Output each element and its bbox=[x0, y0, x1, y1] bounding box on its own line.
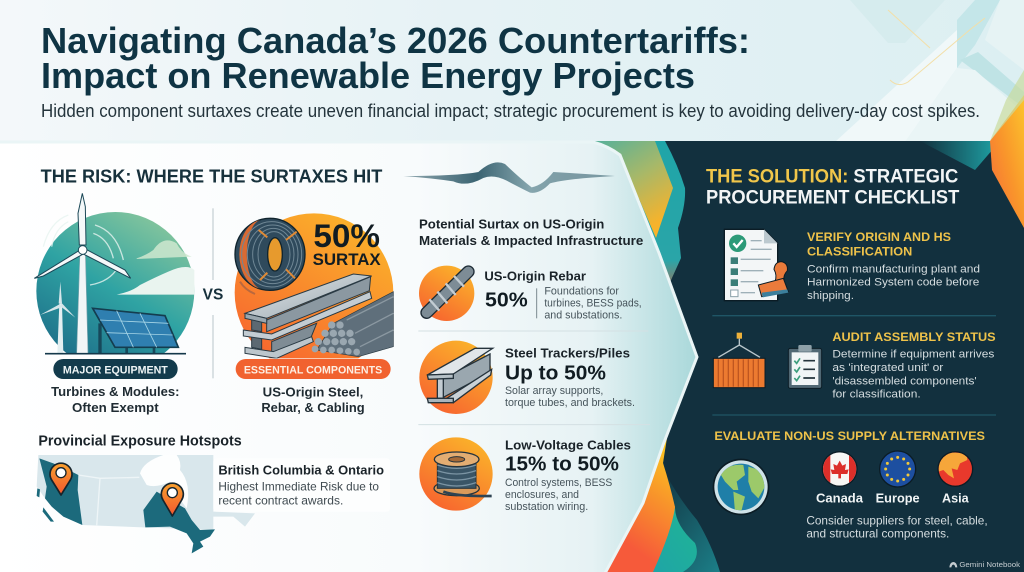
icon: cable spool bbox=[419, 437, 493, 511]
label: us-origin steel: US-Origin Steel, bbox=[263, 385, 363, 400]
text: verify origin: Harmonized System code before bbox=[807, 277, 979, 289]
pill: essential components bbox=[236, 359, 391, 379]
title: Impact on Renewable Energy Projects bbox=[41, 55, 695, 96]
heading: provincial exposure hotspots: Provincial Exposure Hotspots bbox=[38, 432, 242, 449]
callout: 50% surtax: SURTAX bbox=[313, 250, 381, 269]
item: audit assembly bbox=[713, 330, 996, 401]
text: steel trackers: Steel Trackers/Piles bbox=[505, 345, 630, 360]
section: the solution upper bbox=[706, 167, 996, 415]
text: audit assembly: as 'integrated unit' or bbox=[832, 362, 944, 374]
heading: potential surtax: Materials & Impacted Infrastructure bbox=[419, 233, 643, 248]
text: audit assembly: for classification. bbox=[832, 389, 921, 401]
label: us-origin steel bbox=[261, 385, 365, 415]
heading: potential surtax bbox=[419, 217, 643, 248]
text: low-voltage cables: substation wiring. bbox=[505, 501, 588, 513]
icon: pin ontario bbox=[161, 483, 183, 516]
section: the risk bbox=[34, 165, 393, 415]
icon: i-beam bbox=[419, 341, 493, 414]
section: evaluate alternatives bbox=[713, 429, 1020, 569]
heading: the solution: PROCUREMENT CHECKLIST bbox=[706, 187, 959, 208]
pill: major equipment: MAJOR EQUIPMENT bbox=[63, 364, 168, 376]
subtitle: Hidden component surtaxes create uneven financial impact; strategic procurement is key to avoiding delivery-day cost spikes. bbox=[41, 101, 980, 121]
text: british columbia and ontario: recent contract awards. bbox=[218, 494, 343, 507]
labels: regions: Canada bbox=[816, 491, 864, 505]
text: rebar: US-Origin Rebar bbox=[484, 269, 586, 284]
text: rebar: 50% bbox=[485, 289, 528, 312]
heading: the risk: THE RISK: WHERE THE SURTAXES HIT bbox=[41, 165, 383, 186]
text: low-voltage cables: 15% to 50% bbox=[505, 453, 619, 476]
label: us-origin steel: Rebar, & Cabling bbox=[261, 400, 365, 415]
text: consider suppliers: and structural components. bbox=[806, 528, 949, 541]
text: verify origin: shipping. bbox=[807, 290, 854, 302]
text: verify origin: Confirm manufacturing plant and bbox=[807, 263, 980, 275]
divider and vs: VS bbox=[203, 287, 223, 304]
text: low-voltage cables: Low-Voltage Cables bbox=[505, 437, 631, 452]
icon: rebar bbox=[419, 266, 474, 321]
heading: evaluate alternatives: EVALUATE NON-US SUPPLY ALTERNATIVES bbox=[714, 429, 985, 443]
label: turbines and modules: Turbines & Modules: bbox=[51, 384, 179, 399]
title bbox=[41, 20, 750, 96]
text: british columbia and ontario: British Columbia & Ontario bbox=[218, 462, 384, 477]
text: verify origin bbox=[807, 230, 980, 302]
item: low-voltage cables bbox=[419, 437, 631, 513]
icon: canada flag bbox=[822, 451, 858, 487]
text: steel trackers: Up to 50% bbox=[505, 361, 606, 384]
text: rebar: Foundations for bbox=[544, 286, 619, 298]
icon: clipboard bbox=[788, 345, 822, 388]
watermark: gemini notebook: Gemini Notebook bbox=[959, 560, 1020, 569]
text: audit assembly: 'disassembled components' bbox=[832, 375, 977, 387]
section: potential surtax bbox=[403, 162, 650, 513]
text: verify origin: VERIFY ORIGIN AND HS bbox=[807, 230, 951, 244]
left risk panel with chevron bbox=[0, 142, 697, 572]
heading: the solution bbox=[706, 167, 959, 208]
heading: potential surtax: Potential Surtax on US-Origin bbox=[419, 217, 604, 232]
text: audit assembly: AUDIT ASSEMBLY STATUS bbox=[832, 330, 996, 344]
icon: europe flag bbox=[880, 451, 916, 487]
icon: wind turbines and solar panel bbox=[34, 193, 194, 370]
icon: steel, rebar and cable bbox=[235, 213, 393, 372]
title: Navigating Canada’s 2026 Countertariffs: bbox=[41, 20, 750, 61]
text: steel trackers bbox=[505, 345, 635, 409]
text: rebar bbox=[484, 269, 642, 321]
icon: document and stamp bbox=[724, 229, 788, 301]
text: low-voltage cables bbox=[505, 437, 631, 513]
text: audit assembly: Determine if equipment arrives bbox=[832, 349, 995, 361]
callout: 50% surtax: 50% bbox=[313, 217, 380, 254]
callout: 50% surtax bbox=[313, 217, 381, 269]
heading: the solution: STRATEGIC bbox=[853, 167, 958, 188]
map: canada bbox=[37, 455, 255, 553]
text: low-voltage cables: enclosures, and bbox=[505, 489, 579, 501]
labels: regions: Asia bbox=[942, 491, 970, 505]
text: rebar: and substations. bbox=[544, 309, 622, 321]
label: turbines and modules: Often Exempt bbox=[72, 400, 159, 415]
text: consider suppliers: Consider suppliers for steel, cable, bbox=[806, 514, 988, 527]
pill: essential components: ESSENTIAL COMPONENTS bbox=[244, 364, 382, 376]
text: low-voltage cables: Control systems, BESS bbox=[505, 477, 612, 489]
text: audit assembly bbox=[832, 330, 996, 401]
icon: shipping container bbox=[713, 333, 765, 388]
item: rebar bbox=[419, 266, 642, 321]
icon: asia map bbox=[937, 451, 973, 487]
text: british columbia and ontario bbox=[213, 458, 390, 512]
header background bbox=[0, 0, 1024, 142]
icon: pin bc bbox=[50, 463, 72, 495]
decorative wave bbox=[403, 162, 615, 193]
icon: globe bbox=[713, 459, 769, 515]
dark solution panel background bbox=[590, 70, 1024, 572]
text: verify origin: CLASSIFICATION bbox=[807, 244, 912, 258]
labels: regions bbox=[816, 491, 970, 505]
text: steel trackers: torque tubes, and brackets. bbox=[505, 397, 635, 409]
text: consider suppliers bbox=[806, 514, 988, 541]
pill: major equipment bbox=[53, 359, 178, 379]
heading: the solution: THE SOLUTION: bbox=[706, 167, 848, 188]
label: turbines and modules bbox=[51, 384, 179, 415]
text: rebar: turbines, BESS pads, bbox=[544, 298, 642, 310]
text: british columbia and ontario: Highest Immediate Risk due to bbox=[218, 480, 379, 493]
section: provincial hotspots bbox=[37, 432, 390, 553]
text: steel trackers: Solar array supports, bbox=[505, 385, 603, 397]
colored ribbon between panels bbox=[593, 141, 720, 572]
item: steel trackers bbox=[419, 341, 635, 414]
item: verify origin bbox=[724, 229, 980, 302]
labels: regions: Europe bbox=[876, 491, 920, 505]
